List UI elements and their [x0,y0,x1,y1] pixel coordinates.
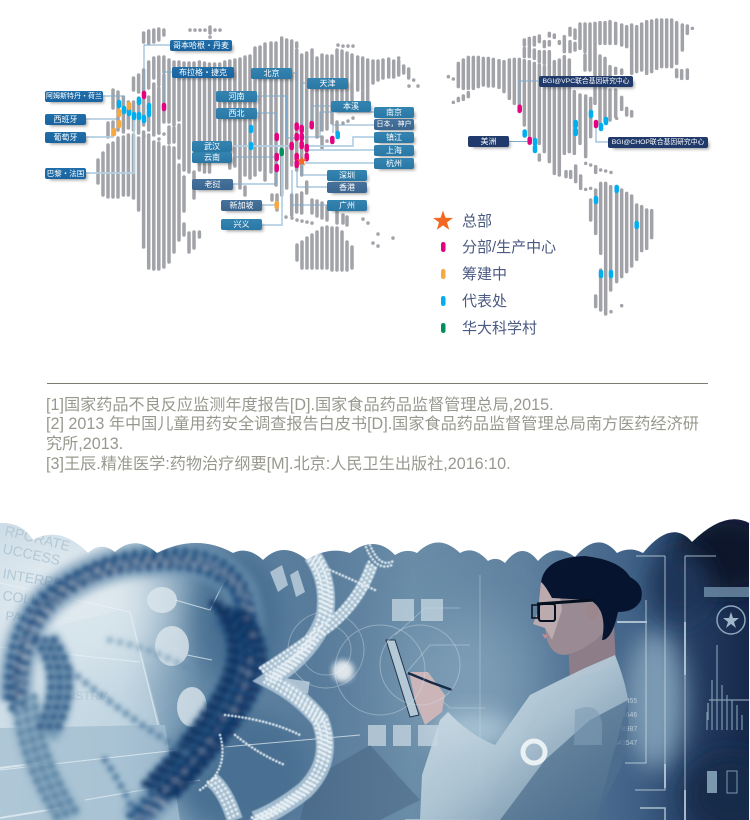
pin: science village [279,150,284,154]
panel below left [0,725,180,820]
legend text: headquarters: 总部 [462,213,492,230]
hair [541,556,642,640]
references text block [46,396,699,473]
connector lines [86,45,608,205]
legend pin: science village [441,323,446,333]
label: Nanjing [374,107,414,118]
label: Americas: 美洲 [480,137,496,146]
label: Zhenjiang [374,132,414,143]
label: Henan [216,91,257,102]
label: Guangzhou [327,200,367,211]
face [533,580,604,655]
glasses arm and lenses [532,600,594,621]
label: Shanghai [374,145,414,156]
label: Zhenjiang: 镇江 [386,133,402,142]
lens flare [332,660,354,682]
circular hologram around tablet [288,612,460,715]
label: BGI CHOP center: BGI@CHOP联合基因研究中心 [612,139,704,146]
faint background words: PAR [5,608,32,626]
map: small islands dots [144,27,418,246]
legend text: branch and production center: 分部/生产中心 [462,239,556,256]
translucent left panel [66,650,160,726]
label: Wuhan: 武汉 [204,142,220,151]
legend star [433,210,453,230]
lab coat dark back [616,703,628,745]
blurred DNA helix, soft base [15,559,247,820]
thick light connector lines [86,113,374,225]
stylus [408,673,452,690]
legend pin: representative office [441,296,446,306]
faint background words: RPORATE [3,522,72,554]
scientist figure [386,556,642,820]
label: Portugal [45,132,86,143]
label: Hong Kong [327,182,367,193]
sharp white DNA helix, pale body [212,555,372,820]
label: Americas [468,136,509,147]
label: Laos [192,179,233,190]
label: Benxi [331,101,371,112]
coat badge circle [523,741,545,763]
references text block: [2] 2013 年中国儿童用药安全调查报告白皮书[D].国家食品药品监督管理总局南方医药经济研 [46,415,699,433]
pins: representative offices [119,99,637,276]
data numbers [616,698,637,745]
references text block: [1]国家药品不良反应监测年度报告[D].国家食品药品监督管理总局,2015. [46,396,554,414]
tablet [386,640,419,717]
label: Paris: 巴黎・法国 [47,169,84,178]
label: Shanghai: 上海 [386,146,402,155]
data numbers: 7643547 [610,740,637,747]
panel light lines [0,580,360,818]
star: headquarters on map [296,156,307,166]
legend pin: branch [441,242,446,252]
label: Shenzhen [327,170,367,181]
data numbers: 3 [586,722,595,739]
label: Yunnan [192,152,232,163]
map: Eurasia, Africa and Australia dotted stripes [98,29,409,270]
label: Hong Kong: 香港 [339,183,355,192]
world map with office locations [86,18,694,333]
label: Spain: 西班牙 [54,115,78,124]
blurred DNA helix, mottled bases [7,551,263,820]
hand [409,672,445,725]
label: Northwest [216,108,257,119]
label: Shenzhen: 深圳 [339,171,355,180]
legend text: representative office: 代表处 [462,293,507,310]
pins: branch and production centers [144,93,596,170]
faint background words: INTERPR [1,565,65,592]
label: BGI CHOP center [608,137,708,148]
photo banner: scientist with DNA helix [0,519,749,820]
label: Hangzhou: 杭州 [386,159,402,168]
background light and shadow areas [0,515,750,820]
round icon badges on panel [147,587,207,727]
faint background words [1,522,111,703]
keyboard grid lower center [300,745,420,820]
hologram icon tiles [270,565,443,746]
label: Benxi: 本溪 [343,102,359,111]
label: Tianjin [307,78,348,89]
label: BGI VPC center: BGI@VPC联合基因研究中心 [543,78,629,85]
label: Prague [172,67,234,78]
label: Prague: 布拉格・捷克 [179,68,227,77]
label: BGI VPC center [539,76,633,87]
label: Northwest: 西北 [228,109,244,118]
label: Amsterdam [45,91,103,102]
label: Copenhagen: 哥本哈根・丹麦 [173,41,229,50]
label: Portugal: 葡萄牙 [54,133,78,142]
legend pin: under construction [441,269,446,279]
legend text: under construction: 筹建中 [462,266,507,283]
label: Wuhan [192,141,232,152]
pins: under construction [114,104,277,207]
data numbers: 3125646 [610,712,637,719]
label: Laos: 老挝 [204,180,220,189]
interface panels and frames [395,556,750,820]
label: Hangzhou [374,158,414,169]
label: Xingyi: 兴义 [234,220,250,229]
label: Nanjing: 南京 [386,108,402,117]
faint background words: ISTRIA [72,689,111,703]
label: Spain [45,114,86,125]
ear [586,603,598,621]
coat pocket frame [574,707,602,745]
map: Americas dotted stripes [448,20,692,314]
references text block: [3]王辰.精准医学:药物治疗纲要[M].北京:人民卫生出版社,2016:10. [46,455,511,473]
label: Tianjin: 天津 [320,79,336,88]
lips [542,634,548,639]
sharp white DNA helix, beaded atoms [200,545,395,820]
faint background words: UCCESS [1,540,62,568]
data numbers: 5678987 [610,726,637,733]
faint background words: COLL [2,587,40,608]
label: Japan Kobe: 日本，神户 [376,121,412,128]
lab coat [420,655,628,820]
label: Beijing [251,68,292,79]
data numbers: 9894455 [610,698,637,705]
label: Japan Kobe [374,119,414,130]
label: Guangzhou: 广州 [339,201,355,210]
label: Beijing: 北京 [264,69,280,78]
label: Yunnan: 云南 [204,153,220,162]
face highlight [533,582,562,640]
label: Singapore: 新加坡 [230,201,254,210]
legend text: science village: 华大科学村 [462,320,537,337]
references text block: 究所,2013. [46,435,123,453]
label: Singapore [221,200,262,211]
label: Amsterdam: 阿姆斯特丹・荷兰 [46,93,102,100]
coat shadow lower right [500,700,628,820]
divider above references [47,383,708,384]
neck [568,626,616,676]
label: Xingyi [221,219,262,230]
right dashboard widgets [704,587,750,793]
label: Henan: 河南 [228,92,244,101]
photo background gradient [0,510,750,820]
